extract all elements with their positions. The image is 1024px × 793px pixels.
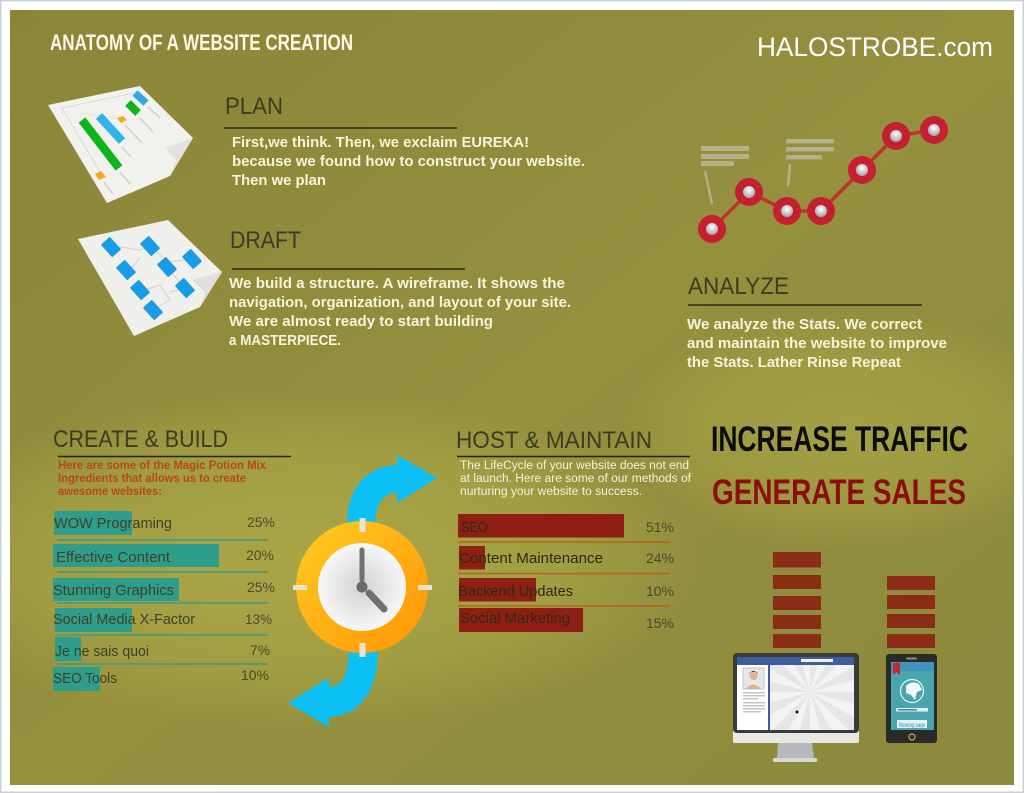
draft text: We build a structure. A wireframe. It shows the: [229, 275, 565, 292]
panel: create and build: [53, 426, 291, 691]
bar chart: ingredients: 25%: [247, 579, 275, 595]
plan heading: PLAN: [225, 93, 283, 120]
analyze text: We analyze the Stats. We correct: [687, 316, 922, 333]
create and build intro: Here are some of the Magic Potion Mix: [58, 460, 267, 472]
bar chart: ingredients: Je ne sais quoi: [55, 644, 149, 660]
create and build heading: CREATE & BUILD: [53, 426, 228, 453]
create and build intro: awesome websites:: [58, 486, 162, 498]
bar chart: maintenance methods: Content Maintenance: [459, 551, 603, 567]
host and maintain intro: nurturing your website to success.: [460, 486, 642, 498]
bar chart: ingredients: 10%: [241, 667, 269, 683]
bar chart: ingredients: 7%: [250, 642, 270, 658]
bar chart: maintenance methods: [458, 514, 674, 632]
title: ANATOMY OF A WEBSITE CREATION: [50, 30, 353, 55]
bar chart: ingredients: 13%: [245, 611, 272, 627]
draft heading: DRAFT: [230, 227, 301, 254]
plan text: First,we think. Then, we exclaim EUREKA!: [232, 134, 529, 151]
analyze text: and maintain the website to improve: [687, 335, 947, 352]
bar chart: ingredients: [53, 511, 275, 691]
icon: draft wireframe document: [78, 220, 222, 336]
draft text: We are almost ready to start building: [229, 313, 493, 330]
section: analyze: [687, 273, 947, 371]
bar chart: ingredients: Social Media X-Factor: [53, 612, 195, 628]
bar chart: maintenance methods: 10%: [646, 583, 674, 599]
icon: cycle arrows and clock: [288, 455, 437, 727]
analyze text: the Stats. Lather Rinse Repeat: [687, 354, 901, 371]
icon: smartphone: Booking page: [899, 722, 925, 729]
section: draft: [229, 227, 571, 349]
create and build intro: [58, 460, 267, 498]
bar chart: maintenance methods: SEO: [461, 520, 488, 536]
host and maintain heading: HOST & MAINTAIN: [456, 427, 652, 454]
icon: desktop monitor: [733, 653, 859, 762]
icon: clock: [293, 518, 432, 657]
bar chart: ingredients: 20%: [246, 547, 274, 563]
icon: plan document: [48, 86, 193, 203]
draft text: a MASTERPIECE.: [229, 332, 341, 349]
bar stack: mobile: [887, 576, 935, 648]
bar chart: ingredients: 25%: [247, 514, 275, 530]
bar chart: ingredients: WOW Programing: [54, 516, 172, 532]
panel: host and maintain: [456, 427, 692, 632]
brand name: HALOSTROBE.com: [757, 32, 993, 62]
bar chart: maintenance methods: Social Marketing: [460, 611, 570, 627]
analyze heading: ANALYZE: [688, 273, 789, 300]
analyze text: [687, 316, 947, 371]
bar chart: ingredients: Stunning Graphics: [53, 583, 174, 599]
line chart: analyze stats: [698, 116, 948, 243]
host and maintain intro: at launch. Here are some of our methods of: [460, 473, 692, 485]
arrow: down and left: [288, 650, 378, 727]
heading: generate sales: GENERATE SALES: [712, 473, 966, 512]
host and maintain intro: [460, 460, 692, 498]
bar stack: desktop: [773, 552, 821, 648]
plan text: Then we plan: [232, 172, 326, 189]
bar chart: maintenance methods: 15%: [646, 615, 674, 631]
section: plan: [224, 93, 585, 189]
create and build intro: Ingredients that allows us to create: [58, 473, 246, 485]
bar chart: maintenance methods: Backend Updates: [458, 584, 573, 600]
icon: smartphone: [886, 654, 937, 743]
arrow: up and right: [347, 455, 437, 524]
bar chart: maintenance methods: 24%: [646, 550, 674, 566]
plan text: because we found how to construct your website.: [232, 153, 585, 170]
draft text: [229, 275, 571, 349]
bar chart: maintenance methods: 51%: [646, 519, 674, 535]
plan text: [232, 134, 585, 189]
bar chart: ingredients: SEO Tools: [53, 671, 117, 687]
draft text: navigation, organization, and layout of your site.: [229, 294, 571, 311]
bar chart: ingredients: Effective Content: [56, 550, 170, 566]
host and maintain intro: The LifeCycle of your website does not end: [460, 460, 689, 472]
